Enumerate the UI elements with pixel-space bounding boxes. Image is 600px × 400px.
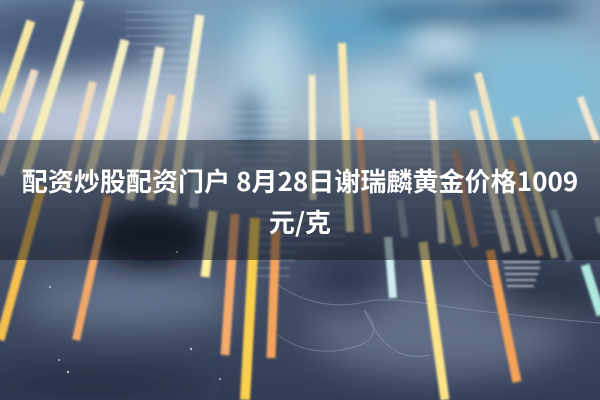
title band — [0, 140, 600, 260]
title: 配资炒股配资门户 8月28日谢瑞麟黄金价格1009 — [22, 162, 578, 199]
bright stripes — [503, 262, 540, 286]
title — [22, 162, 578, 240]
sparkle dots — [49, 251, 221, 380]
title: 元/克 — [269, 203, 331, 240]
data stripes — [125, 12, 540, 276]
chart curves — [278, 235, 600, 357]
